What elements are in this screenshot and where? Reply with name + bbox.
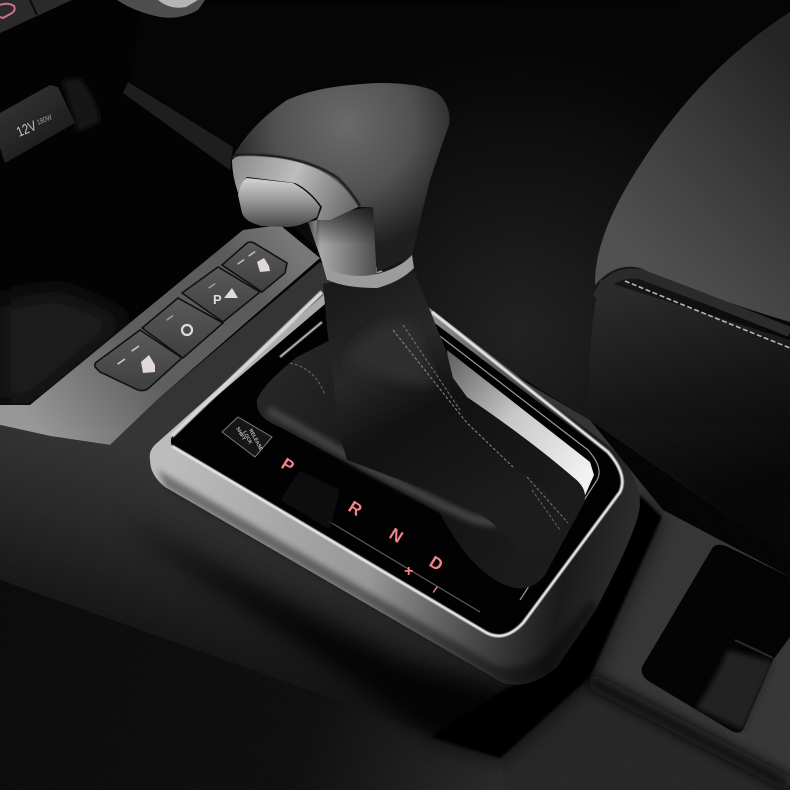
shift lock release button: RELEASE xyxy=(247,428,264,452)
gear indicators: + xyxy=(404,563,413,580)
console texture xyxy=(0,425,790,790)
black gutter round bezel xyxy=(430,495,662,758)
heated seat and parking buttons xyxy=(95,242,287,391)
gear indicators: P xyxy=(278,454,298,476)
gear indicators: – xyxy=(425,581,443,597)
button: heated steering wheel xyxy=(142,298,223,358)
lip shadow line xyxy=(234,155,360,206)
shift bezel: silver surround xyxy=(150,258,640,685)
chrome shaft xyxy=(308,207,377,280)
right console lower surface xyxy=(500,677,790,790)
shaft shadow xyxy=(315,207,375,245)
shift lock release button: SHIFT xyxy=(234,426,246,442)
right console top surface xyxy=(590,510,790,785)
skirt highlight xyxy=(268,410,525,522)
seat piping xyxy=(597,274,790,332)
reflective glare on gate xyxy=(447,350,594,500)
lower body of console xyxy=(0,580,590,790)
carpet area xyxy=(132,0,790,560)
shadow on right console xyxy=(590,680,790,785)
chrome lip xyxy=(232,155,358,220)
collar xyxy=(327,255,414,288)
gear indicators xyxy=(278,454,446,597)
seat: cushion upper xyxy=(595,12,790,322)
top left switch panel xyxy=(0,0,205,33)
textured storage mat xyxy=(0,290,130,405)
button: heated seat right xyxy=(222,242,287,292)
gear boot leather xyxy=(257,266,585,588)
button: parking sensor: P xyxy=(213,292,222,307)
gear indicators: D xyxy=(426,552,446,575)
neck highlight xyxy=(345,320,433,385)
boot neck xyxy=(323,266,567,554)
gear indicators: N xyxy=(386,524,406,547)
boot stitching xyxy=(393,330,513,467)
shifter knob xyxy=(232,83,449,288)
shift gate: black gloss xyxy=(171,270,622,636)
main textured console xyxy=(0,262,790,790)
cup holder tray xyxy=(642,545,790,732)
release button xyxy=(238,178,320,227)
12V socket panel: 12V xyxy=(14,118,39,140)
shift lock release button: LOCK xyxy=(241,430,253,446)
knob body xyxy=(232,83,449,272)
12V socket panel xyxy=(0,78,100,163)
shadow beneath bezel xyxy=(120,497,660,758)
button: heated seat left xyxy=(95,330,182,391)
12V socket panel: 180W xyxy=(36,114,54,127)
button: parking sensor xyxy=(182,267,260,322)
seat: cushion lower xyxy=(589,280,790,552)
gear indicators: R xyxy=(345,497,365,520)
seat stitching xyxy=(625,281,790,348)
shift lock release button xyxy=(222,417,272,457)
boot skirt xyxy=(257,335,585,588)
gate slot xyxy=(280,470,340,530)
silver switch panel xyxy=(0,225,320,445)
console side strip xyxy=(123,82,233,170)
